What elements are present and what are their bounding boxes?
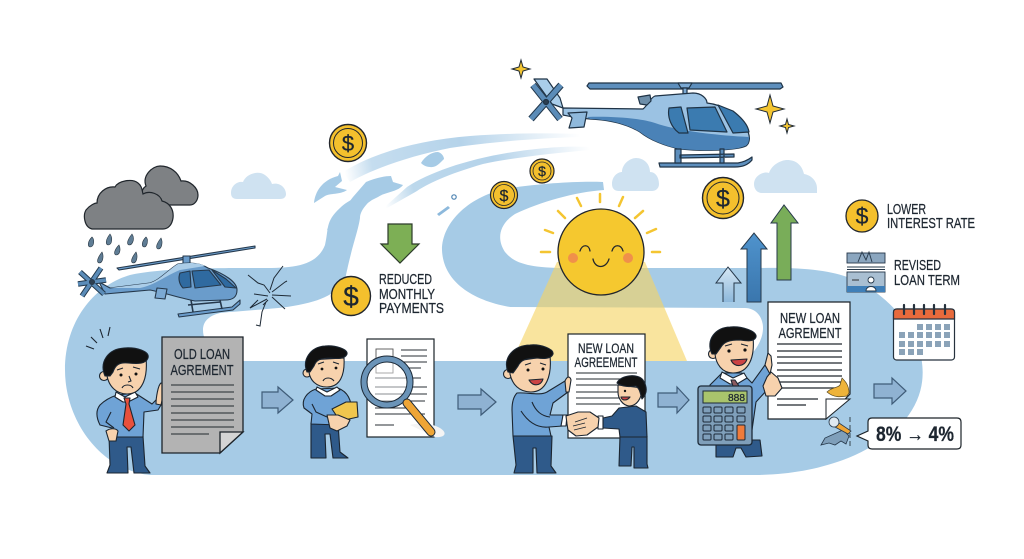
label: revised loan term	[894, 258, 960, 289]
calculator: 888	[728, 393, 745, 404]
label: reduced monthly payments: PAYMENTS	[379, 300, 444, 317]
large helicopter	[531, 79, 783, 167]
new loan document: centre: NEW LOAN	[578, 341, 634, 356]
coin: lower interest rate	[846, 200, 878, 232]
rain	[88, 234, 162, 263]
arrow 2	[458, 389, 496, 415]
new loan document: centre	[568, 334, 645, 438]
label: reduced monthly payments: REDUCED	[379, 271, 432, 288]
new loan document: right: NEW LOAN	[780, 310, 840, 327]
coin: reduced payments	[332, 276, 370, 316]
old loan document	[162, 337, 243, 453]
sun light beam	[512, 262, 687, 361]
arrow 3	[658, 387, 689, 413]
icon: calendar	[894, 305, 954, 360]
crack	[248, 266, 291, 326]
coin: reduced payments: $	[343, 281, 359, 312]
storm clouds	[84, 166, 198, 229]
cloud: left	[231, 173, 286, 199]
new loan document: centre: AGREEMENT	[574, 355, 638, 370]
new loan document: right	[768, 302, 850, 419]
arrow 4	[874, 378, 906, 404]
person: calculating	[708, 327, 782, 457]
old loan document: OLD LOAN	[174, 346, 230, 363]
label: revised loan term: REVISED	[894, 258, 941, 274]
key and small figure	[821, 417, 851, 448]
label: reduced monthly payments	[379, 271, 444, 317]
person: worried	[86, 327, 164, 473]
callout: 8% to 4%	[857, 418, 961, 449]
coin: small 1: $	[538, 163, 546, 179]
coin: small 2	[490, 182, 518, 208]
coin: small 1	[530, 159, 554, 183]
old loan document: AGREMENT	[170, 362, 234, 379]
coin: lower interest rate: $	[856, 203, 869, 229]
sun	[541, 194, 660, 295]
label: lower interest rate: LOWER	[887, 202, 926, 218]
label: reduced monthly payments: MONTHLY	[379, 286, 435, 303]
up arrows	[716, 205, 798, 302]
small helicopter	[78, 246, 255, 317]
new loan document: right: AGREMENT	[778, 325, 842, 342]
icon: revised term cards	[847, 252, 885, 292]
arrow 1	[262, 387, 293, 413]
river path	[65, 133, 923, 475]
document with magnifier	[361, 339, 445, 437]
coin: small 2: $	[500, 188, 509, 205]
label: lower interest rate: INTEREST RATE	[887, 216, 975, 232]
cloud: right	[754, 160, 817, 193]
callout: 8% to 4%: 8% → 4%	[876, 423, 954, 446]
label: revised loan term: LOAN TERM	[894, 273, 960, 289]
calculator	[698, 386, 752, 445]
person: handshake	[504, 345, 648, 473]
cloud: centre	[612, 158, 659, 191]
coin: right	[702, 178, 744, 218]
person: reviewing	[303, 346, 358, 458]
coin: top: $	[342, 131, 354, 156]
coin: right: $	[716, 185, 730, 213]
coin: top	[330, 124, 366, 162]
label: lower interest rate	[887, 202, 975, 232]
sparkles	[512, 60, 794, 133]
down arrow	[381, 224, 419, 263]
